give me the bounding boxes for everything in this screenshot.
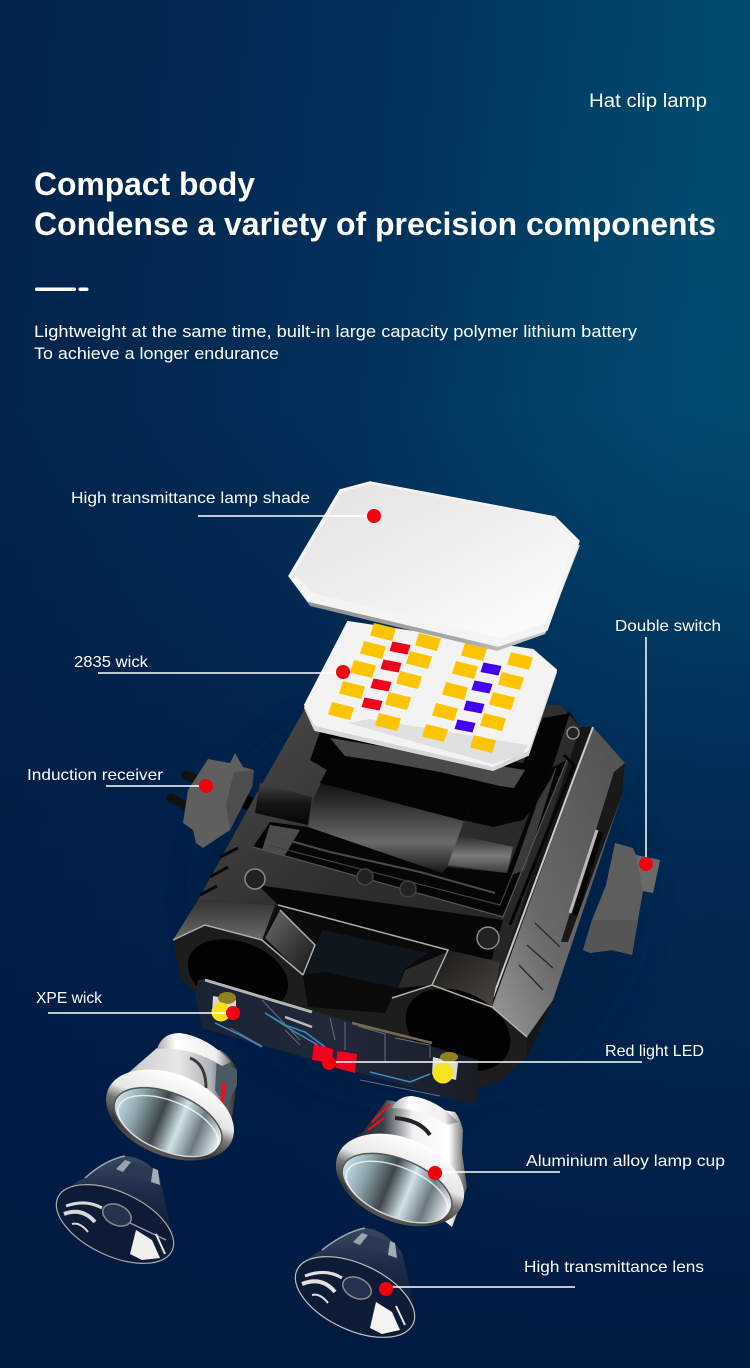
front notch glass bbox=[305, 930, 428, 988]
callout: lens: High transmittance lens bbox=[524, 1259, 704, 1276]
front top-right panel bbox=[432, 950, 500, 1007]
red chips bbox=[362, 642, 410, 710]
left yellow LED bbox=[212, 996, 236, 1018]
body: side dark strip bbox=[561, 763, 625, 942]
description text bbox=[34, 322, 638, 363]
callout: red light LED: Red light LED bbox=[605, 1043, 704, 1060]
body: side vents bbox=[519, 923, 560, 990]
callout: lamp shade bbox=[71, 490, 381, 523]
callout: lamp shade: High transmittance lamp shade bbox=[71, 490, 310, 507]
front notch right wedge bbox=[398, 953, 445, 988]
LED lamp board bbox=[305, 622, 556, 770]
lamp shade bbox=[289, 482, 580, 651]
heading: Condense a variety of precision components bbox=[34, 206, 716, 242]
front highlights bbox=[173, 905, 527, 1037]
circuit traces bbox=[215, 1013, 430, 1082]
callout: double switch bbox=[615, 618, 721, 871]
callout: induction receiver: Induction receiver bbox=[27, 767, 164, 784]
accent dash bbox=[35, 288, 88, 291]
description text: Lightweight at the same time, built-in large capacity polymer lithium battery bbox=[34, 322, 638, 341]
callout: aluminium cup bbox=[428, 1153, 725, 1180]
circuit board strip bbox=[195, 979, 478, 1104]
body: screws bbox=[245, 727, 579, 949]
left lens socket bbox=[178, 926, 298, 1024]
body: mechanism recess bbox=[253, 760, 567, 917]
body: black shadow under board bbox=[310, 713, 570, 827]
body: hinge cylinders bbox=[255, 770, 513, 873]
double switch bbox=[583, 843, 660, 955]
product tag: hat clip lamp: Hat clip lamp bbox=[589, 91, 707, 112]
right lens socket bbox=[392, 972, 524, 1088]
body: dark band under recess bbox=[258, 885, 503, 965]
body: front-left chamfer bbox=[173, 900, 275, 940]
induction receiver bbox=[171, 753, 262, 848]
callout: 2835 wick: 2835 wick bbox=[74, 654, 149, 671]
callout: double switch: Double switch bbox=[615, 618, 721, 635]
body: vents bbox=[200, 848, 238, 895]
callouts bbox=[27, 490, 725, 1296]
right yellow LED bbox=[432, 1057, 458, 1080]
main body bbox=[173, 690, 625, 1088]
body: right face bbox=[492, 727, 625, 1037]
front notch bbox=[263, 905, 448, 1013]
body: side highlight bbox=[493, 727, 593, 997]
callout: induction receiver bbox=[27, 767, 213, 793]
description text: To achieve a longer endurance bbox=[34, 344, 279, 363]
heading bbox=[34, 166, 716, 242]
red LEDs bbox=[312, 1044, 357, 1073]
callout: XPE wick bbox=[36, 990, 240, 1020]
callout: 2835 wick bbox=[74, 654, 350, 679]
callout: red light LED bbox=[322, 1043, 704, 1070]
callout: XPE wick: XPE wick bbox=[36, 990, 103, 1007]
device shadow bbox=[200, 700, 640, 1100]
body: top face bbox=[198, 705, 580, 997]
exploded product illustration bbox=[44, 482, 660, 1354]
heading: Compact body bbox=[34, 166, 255, 202]
body: grey plate bbox=[330, 738, 525, 788]
callout: aluminium cup: Aluminium alloy lamp cup bbox=[526, 1153, 725, 1170]
body: side slot bbox=[570, 830, 601, 915]
callout: lens bbox=[379, 1259, 704, 1296]
blue chips bbox=[454, 662, 502, 732]
right lens bbox=[283, 1228, 427, 1354]
front notch left wedge bbox=[265, 910, 315, 975]
amber chips bbox=[328, 623, 533, 753]
front bezel bbox=[173, 925, 527, 1087]
left lens bbox=[44, 1156, 186, 1280]
right aluminium cup bbox=[322, 1096, 478, 1244]
left aluminium cup bbox=[93, 1033, 247, 1178]
body: frame lines bbox=[510, 755, 574, 925]
